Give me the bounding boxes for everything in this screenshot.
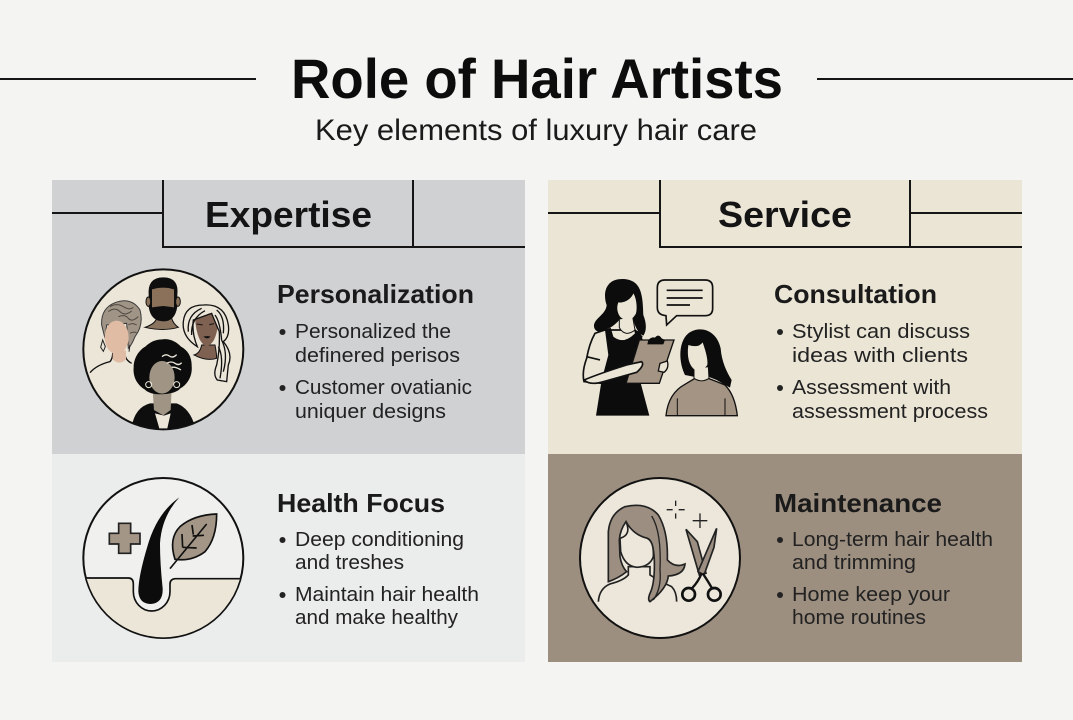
- text: maintenance: Maintenance: [774, 488, 942, 518]
- heading: service tab: Service: [718, 194, 852, 235]
- text: personalization: Personalization: [277, 279, 474, 309]
- text: consultation: ideas with clients: [792, 344, 968, 367]
- text: consultation: assessment process: [792, 400, 988, 423]
- title: Role of Hair Artists: [291, 47, 783, 110]
- text: personalization: definered perisos: [295, 344, 460, 367]
- text: maintenance: Long-term hair health: [792, 528, 993, 551]
- text: maintenance: Home keep your: [792, 583, 950, 606]
- panel: service: [548, 180, 1022, 662]
- text: consultation: Stylist can discuss: [792, 320, 970, 343]
- icon: stylist consultation: [583, 279, 737, 416]
- text: health focus: and treshes: [295, 551, 404, 574]
- text: consultation: [774, 279, 988, 423]
- text: maintenance: home routines: [792, 606, 926, 629]
- subtitle: Key elements of luxury hair care: [315, 114, 757, 147]
- text: personalization: Customer ovatianic: [295, 376, 472, 399]
- text: health focus: Maintain hair health: [295, 583, 479, 606]
- icon: hair and scissors: [580, 478, 740, 638]
- heading: expertise tab: Expertise: [205, 194, 372, 235]
- text: consultation: Assessment with: [792, 376, 951, 399]
- text: consultation: Consultation: [774, 279, 937, 309]
- icon: hair follicle: [80, 478, 247, 647]
- text: health focus: [277, 488, 479, 629]
- text: maintenance: and trimming: [792, 551, 916, 574]
- text: health focus: and make healthy: [295, 606, 459, 629]
- text: health focus: Deep conditioning: [295, 528, 464, 551]
- text: personalization: [277, 279, 474, 423]
- icon: diverse people: [83, 269, 243, 432]
- text: maintenance: [774, 488, 993, 629]
- panel: expertise: [52, 180, 525, 662]
- heading: expertise tab: [52, 180, 525, 247]
- heading: service tab: [548, 180, 1022, 247]
- text: personalization: Personalized the: [295, 320, 451, 343]
- text: personalization: uniquer designs: [295, 400, 446, 423]
- text: health focus: Health Focus: [277, 488, 445, 518]
